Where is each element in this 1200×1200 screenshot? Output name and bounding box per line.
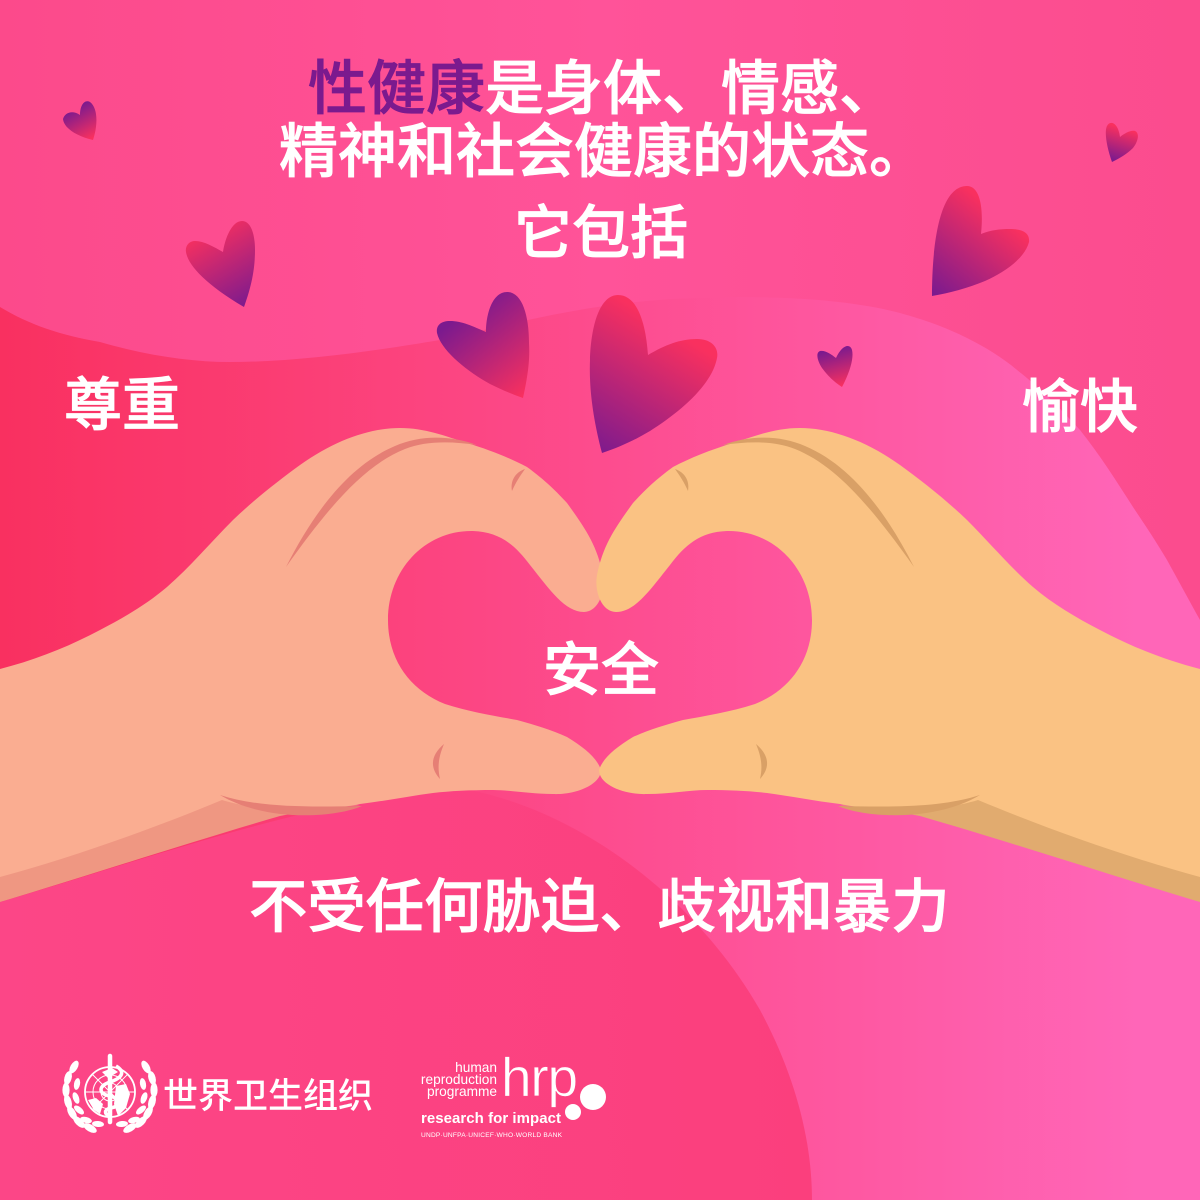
crease: back of hand [286, 438, 477, 567]
label: pleasure: 愉快 [1022, 375, 1138, 440]
WHO logo [62, 1056, 373, 1135]
heart: centre left [437, 292, 529, 398]
title: 精神和社会健康的状态。 [279, 119, 928, 185]
crease: index finger [512, 469, 525, 491]
heart: top left small [63, 101, 96, 140]
programme name: programme [427, 1084, 497, 1099]
crease: index finger [675, 469, 688, 491]
WHO emblem [62, 1056, 158, 1135]
title: 性健康是身体、情感、 [308, 56, 898, 122]
wrist shade [0, 790, 360, 902]
laurel right [116, 1059, 158, 1135]
programme name: human [455, 1060, 497, 1075]
crease: thumb [756, 744, 767, 779]
heart: right small [817, 346, 853, 387]
HRP logo [421, 1046, 606, 1139]
wrist shade [840, 790, 1200, 902]
WHO name: 世界卫生组织 [163, 1077, 373, 1116]
dots [565, 1084, 606, 1120]
title [279, 56, 928, 185]
programme name: reproduction [421, 1072, 497, 1087]
hrp wordmark: hrp [501, 1046, 577, 1108]
hand shape [596, 428, 1200, 877]
left hand [0, 428, 604, 902]
heart: right medium [932, 186, 1029, 296]
hand shape [0, 428, 604, 877]
label: respect: 尊重 [64, 373, 180, 438]
background wave [0, 297, 1200, 1200]
caption: 不受任何胁迫、歧视和暴力 [249, 875, 950, 940]
label: safety: 安全 [543, 638, 659, 703]
right hand [596, 428, 1200, 902]
laurel left [62, 1059, 104, 1135]
tagline: research for impact [421, 1110, 561, 1127]
staff and serpent [101, 1056, 122, 1122]
crease: wrist [220, 795, 362, 815]
heart: left medium [186, 221, 255, 307]
crease: thumb [433, 744, 444, 779]
lower left background shape [0, 790, 812, 1200]
programme name [421, 1060, 497, 1099]
heart: centre large [590, 295, 717, 453]
heart: top right small [1106, 123, 1138, 162]
crease: wrist [838, 795, 980, 815]
crease: back of hand [723, 438, 914, 567]
subtitle: 它包括 [514, 201, 688, 266]
continents [88, 1068, 130, 1116]
partners: UNDP·UNFPA·UNICEF·WHO·WORLD BANK [421, 1132, 563, 1139]
globe [85, 1067, 135, 1117]
